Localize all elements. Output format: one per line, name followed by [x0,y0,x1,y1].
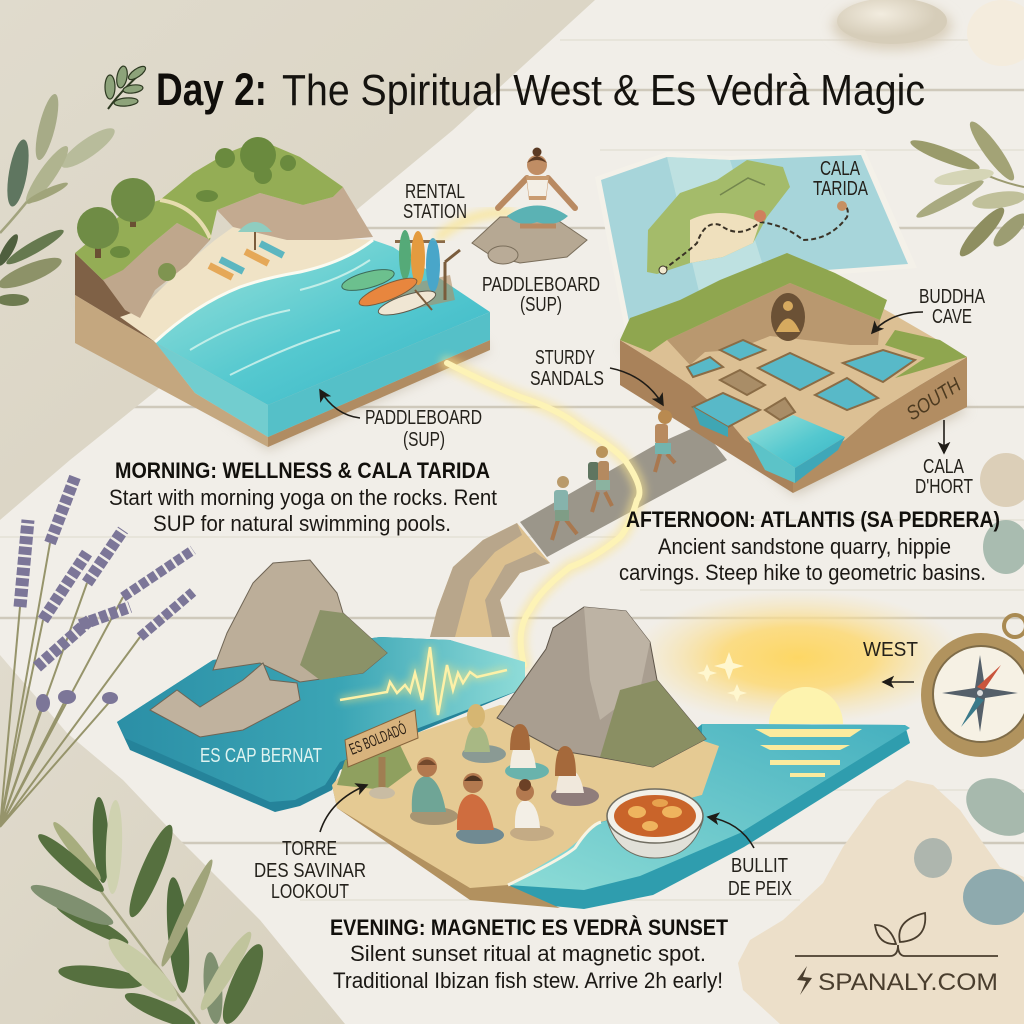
right cliff face [793,357,967,493]
quarry floor [620,253,967,470]
evening text block [330,915,729,993]
label: sturdy sandals: SANDALS [530,368,604,390]
woman center [505,724,549,780]
label: rental station: STATION [403,201,467,223]
upper cliff [217,187,373,240]
label: buddha cave [919,286,986,328]
left cliff face [620,340,793,493]
hiker 1 [552,476,577,540]
rock: Es Vedrà [497,607,706,767]
evening text block: Traditional Ibizan fish stew. Arrive 2h early! [333,968,723,993]
label: west: WEST [863,639,918,661]
evening text block: Silent sunset ritual at magnetic spot. [350,941,706,966]
limestone slab with logo [738,780,1024,1024]
label: paddleboard top: (SUP) [520,294,562,316]
stones top right [832,0,1024,66]
evening text block: EVENING: MAGNETIC ES VEDRÀ SUNSET [330,915,729,940]
compass [921,615,1024,757]
sea front right [268,312,490,437]
morning text block [109,458,497,536]
sand beach [332,705,719,908]
base band [268,340,490,447]
afternoon text block: Ancient sandstone quarry, hippie [658,534,951,559]
linen cloth bottom left [0,655,345,1024]
glowing path [440,212,639,665]
label: sturdy sandals [530,347,604,390]
label: torre des savinar: DES SAVINAR [254,860,366,882]
cliff left face dark [75,253,155,342]
label: cala tarida [813,158,869,200]
heartbeat line [340,647,507,715]
label: buddha cave: CAVE [932,306,972,328]
label: torre des savinar [254,838,366,903]
south label: SOUTH [903,374,965,425]
child [510,779,554,841]
right grass [885,330,967,378]
label: es cap bernat: ES CAP BERNAT [200,745,322,767]
olive sprig top right [908,117,1024,261]
rock: Es Bernat left [150,560,387,737]
label: sturdy sandals: STURDY [535,347,595,369]
sea top [155,240,490,405]
label: paddleboard lower: PADDLEBOARD [365,407,482,429]
hiker 3 [655,410,675,472]
title [105,64,925,115]
annotation arrows [320,312,944,848]
title: The Spiritual West & Es Vedrà Magic [282,66,925,115]
front cut pool left [693,407,728,437]
Es Cap Bernat sea platform [117,637,525,812]
label: cala d'hort: CALA [923,456,965,478]
earth strata [75,295,268,447]
sand [120,227,373,342]
label: cala d'hort [915,456,973,498]
grass [75,140,343,280]
man orange shirt [456,773,504,844]
yoga figure on rock [472,148,587,264]
paddleboards and rental station [340,230,460,320]
label: torre des savinar: TORRE [282,838,337,860]
umbrella and loungers [158,222,285,281]
trees and bushes [77,137,296,258]
label: rental station [403,181,467,223]
grass rim [620,253,887,352]
blond woman [462,704,506,763]
label: paddleboard lower [365,407,482,451]
title: Day 2: [156,64,267,115]
label: cala tarida: TARIDA [813,178,869,200]
sea front left [155,342,268,437]
label: bullit de peix [728,855,792,900]
gully [430,523,550,637]
morning text block: SUP for natural swimming pools. [153,511,451,536]
olive sprig top left [0,92,119,306]
label: paddleboard top [482,274,600,316]
seated group [410,704,599,844]
label: paddleboard top: PADDLEBOARD [482,274,600,296]
label: bullit de peix: DE PEIX [728,878,792,900]
logo mark [795,913,998,956]
label: torre des savinar: LOOKOUT [271,881,349,903]
wave highlights [190,260,370,375]
sun [769,687,843,724]
label: rental station: RENTAL [405,181,465,203]
label: paddleboard lower: (SUP) [403,429,445,451]
label: buddha cave: BUDDHA [919,286,986,308]
man teal shirt [410,757,458,825]
quarry diorama: Atlantis [620,253,968,495]
bowl of bullit de peix [607,789,703,858]
pools [687,340,915,427]
afternoon text block: carvings. Steep hike to geometric basins. [619,560,986,585]
linen cloth top left [0,0,595,520]
label: cala d'hort: D'HORT [915,476,973,498]
morning text block: MORNING: WELLNESS & CALA TARIDA [115,458,490,483]
morning text block: Start with morning yoga on the rocks. Rent [109,485,497,510]
large front pool [747,415,845,468]
sparkles [697,652,747,702]
logo bolt [797,966,812,995]
back wall [667,283,880,365]
map [595,150,917,340]
label: bullit de peix: BULLIT [731,855,788,877]
sign Es Boldadó: ES BOLDADÓ [346,719,409,759]
icon: title leaf [105,64,147,109]
lower cliff [103,223,210,318]
hiker 2 [588,446,612,512]
pebble small [914,838,952,878]
lavender [0,477,193,827]
sunset sea [490,724,910,909]
road [520,425,727,557]
pebbles right [956,453,1024,848]
afternoon text block [619,507,1000,585]
logo text: SPANALY.COM [818,969,998,996]
buddha niche [771,293,805,341]
woman right [551,746,599,806]
morning beach diorama [75,137,490,450]
label: cala tarida: CALA [820,158,861,180]
sunset glow [630,590,965,725]
olive branch bottom left [27,797,271,1024]
foam [155,240,373,342]
pebble large [963,869,1024,925]
hikers [552,410,675,540]
sign Es Boldadó [337,710,418,799]
